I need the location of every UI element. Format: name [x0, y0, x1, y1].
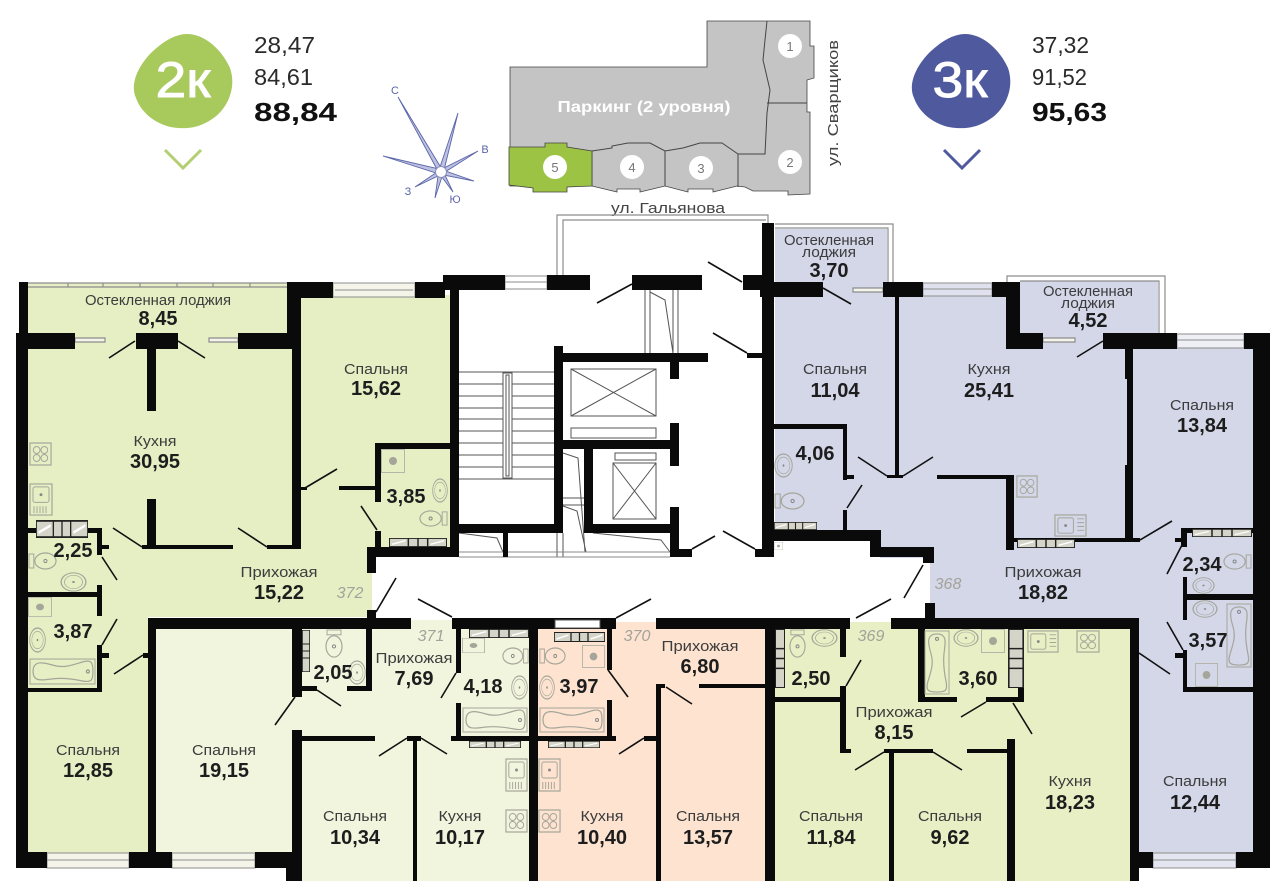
label: bedroom 11,04: 11,04: [811, 380, 860, 402]
label: bath 3,85: 3,85: [387, 486, 425, 508]
label: kitchen 18,23: [1045, 773, 1095, 814]
label: hall 7,69: Прихожая: [376, 650, 452, 667]
label: bath 3,97: 3,97: [560, 676, 598, 698]
label: bedroom 15,62: Спальня: [344, 361, 408, 378]
label: bedroom 13,57: 13,57: [683, 827, 733, 849]
floor plan: [16, 215, 1270, 881]
label: bedroom 11,84: 11,84: [807, 827, 856, 849]
label: hall 18,82: 18,82: [1018, 582, 1068, 604]
fixtures: drain boxes: [28, 450, 1218, 686]
fixtures: toilets: [29, 493, 1251, 664]
header: 3-room apartment summary: [912, 32, 1107, 168]
label: kitchen 25,41: [964, 361, 1014, 402]
label: bedroom 13,84: 13,84: [1177, 415, 1228, 437]
label: bath 2,34: 2,34: [1183, 554, 1222, 576]
label: bedroom 19,15: Спальня: [192, 742, 256, 759]
icon: compass rose: Ю: [449, 194, 461, 206]
building number text: 4: [628, 160, 636, 175]
label: apartment 372: 372: [337, 585, 363, 602]
label: hall 18,82: Прихожая: [1004, 564, 1082, 581]
label: hall 8,15: Прихожая: [856, 704, 932, 721]
fixtures: bathtubs: [30, 604, 1251, 732]
label: bath 3,87: 3,87: [54, 621, 92, 643]
label: hall 7,69: 7,69: [395, 668, 433, 690]
label: bath 3,60: 3,60: [959, 668, 997, 690]
label: bedroom 11,04: [803, 361, 867, 402]
label: kitchen 10,40: [577, 808, 627, 849]
label: loggia 8,45: Остекленная лоджия: [85, 292, 231, 309]
areas: 2к: 84,61: [254, 64, 313, 90]
label: kitchen 25,41: Кухня: [968, 361, 1010, 378]
label: loggia 8,45: [85, 292, 231, 330]
areas: 3к: 95,63: [1032, 97, 1107, 127]
building number text: 1: [786, 39, 794, 54]
areas: 3к: [1032, 32, 1107, 127]
parking label: Паркинг (2 уровня): [558, 99, 730, 116]
label: loggia 3,70: Остекленная: [784, 232, 874, 249]
label: bedroom 9,62: Спальня: [918, 808, 982, 825]
windows: [47, 276, 1244, 868]
label: kitchen 30,95: [130, 433, 180, 473]
apartment 368 fill: [775, 229, 1253, 855]
building dividers: [592, 21, 807, 187]
label: hall 15,22: 15,22: [254, 582, 304, 604]
label: bedroom 11,84: [799, 808, 863, 849]
label: bedroom 10,34: 10,34: [330, 827, 381, 849]
label: bedroom 12,85: [56, 742, 120, 782]
label: bedroom 11,84: Спальня: [799, 808, 863, 825]
label: hall 15,22: Прихожая: [240, 564, 318, 581]
label: bedroom 15,62: [344, 361, 408, 400]
icon: blue chevron: [944, 150, 980, 168]
label: bath 4,18: 4,18: [464, 676, 502, 698]
building core: stairs and lifts: [459, 290, 678, 557]
areas: 2к: 28,47: [254, 32, 315, 58]
apartment 372 fill: [20, 283, 450, 855]
building numbers: [543, 34, 802, 180]
label: loggia 3,70: лоджия: [802, 244, 856, 261]
loggia glazing outlines: [28, 215, 1165, 342]
building number text: [551, 39, 794, 176]
label: hall 6,80: 6,80: [681, 656, 719, 678]
building body: [510, 21, 814, 195]
icon: 2к green blob: 2к: [156, 52, 212, 108]
label: kitchen 18,23: 18,23: [1045, 792, 1095, 814]
label: kitchen 10,40: 10,40: [577, 827, 627, 849]
label: loggia 3,70: [784, 232, 874, 282]
building number text: 2: [786, 155, 794, 170]
fixtures: wash basins: [30, 454, 1217, 699]
label: bath 4,06: 4,06: [796, 443, 834, 465]
label: bedroom 12,44: Спальня: [1163, 773, 1227, 790]
icon: compass rose: З: [405, 186, 412, 198]
label: kitchen 10,17: [435, 808, 485, 849]
areas: 2к: [254, 32, 338, 127]
label: apartment 370: 370: [624, 628, 650, 645]
label: bedroom 13,84: [1170, 397, 1234, 437]
label: hall 18,82: [1004, 564, 1082, 604]
label: kitchen 18,23: Кухня: [1048, 773, 1092, 790]
apartment 371 fill: [148, 620, 532, 881]
label: loggia 4,52: лоджия: [1061, 295, 1115, 312]
label: kitchen 10,17: Кухня: [438, 808, 482, 825]
fixtures: utility risers: [36, 520, 1251, 748]
label: bedroom 13,57: Спальня: [676, 808, 740, 825]
label: kitchen 25,41: 25,41: [964, 380, 1014, 402]
street: Сварщиков: ул. Сварщиков: [825, 40, 842, 166]
label: bedroom 13,57: [676, 808, 740, 849]
areas: 2к: 88,84: [254, 97, 338, 127]
icon: green chevron: [165, 150, 201, 168]
building number text: 3: [697, 161, 705, 176]
label: bedroom 13,84: Спальня: [1170, 397, 1234, 414]
icon: 3к blue blob: 3к: [932, 52, 989, 108]
label: bedroom 9,62: 9,62: [931, 827, 969, 849]
label: hall 6,80: Прихожая: [662, 638, 738, 655]
label: loggia 3,70: 3,70: [810, 260, 848, 282]
street: Гальянова: ул. Гальянова: [611, 200, 726, 217]
label: bedroom 12,85: 12,85: [63, 760, 113, 782]
building number text: 5: [551, 160, 559, 175]
label: bedroom 12,44: [1163, 773, 1227, 814]
label: kitchen 10,40: Кухня: [580, 808, 624, 825]
fixtures: stoves: [30, 443, 1099, 832]
label: loggia 4,52: [1043, 283, 1133, 332]
label: apartment 368: 368: [935, 576, 961, 593]
label: bedroom 10,34: [323, 808, 387, 849]
label: bedroom 10,34: Спальня: [323, 808, 387, 825]
label: loggia 4,52: Остекленная: [1043, 283, 1133, 300]
label: bath 2,05: 2,05: [314, 662, 352, 684]
label: bedroom 11,04: Спальня: [803, 361, 867, 378]
label: bedroom 12,85: Спальня: [56, 742, 120, 759]
label: kitchen 10,17: 10,17: [435, 827, 485, 849]
label: bath 2,50: 2,50: [792, 668, 830, 690]
label: bedroom 9,62: [918, 808, 982, 849]
icon: 2к green blob: [134, 34, 232, 128]
header: 2-room apartment summary: [134, 32, 338, 168]
fixtures: kitchen sinks: [30, 484, 1086, 791]
icon: compass rose: В: [481, 144, 489, 156]
areas: 3к: 37,32: [1032, 32, 1089, 58]
label: bedroom 12,44: 12,44: [1170, 792, 1221, 814]
label: loggia 4,52: 4,52: [1069, 310, 1107, 332]
label: bedroom 19,15: 19,15: [199, 760, 249, 782]
icon: compass rose: [383, 85, 489, 206]
label: bedroom 19,15: [192, 742, 256, 782]
label: kitchen 30,95: 30,95: [130, 451, 180, 473]
icon: compass rose: С: [391, 85, 399, 97]
label: bedroom 15,62: 15,62: [351, 378, 401, 400]
label: loggia 8,45: 8,45: [139, 308, 177, 330]
door swings: [102, 262, 1183, 770]
label: hall 8,15: [856, 704, 932, 744]
label: kitchen 30,95: Кухня: [134, 433, 176, 450]
label: hall 8,15: 8,15: [875, 722, 913, 744]
label: hall 6,80: [662, 638, 738, 678]
apartment 370 fill: [536, 622, 768, 881]
walls: [16, 223, 1270, 881]
label: hall 15,22: [240, 564, 318, 604]
building 5 highlighted: [509, 143, 592, 192]
label: hall 7,69: [376, 650, 452, 690]
label: bath 3,57: 3,57: [1189, 630, 1227, 652]
label: apartment 369: 369: [858, 628, 884, 645]
icon: 3к blue blob: [912, 34, 1010, 128]
site map: [509, 21, 842, 217]
label: apartment 371: 371: [418, 628, 444, 645]
label: bath 2,25: 2,25: [54, 540, 92, 562]
apartment 369 fill: [772, 622, 1132, 881]
areas: 3к: 91,52: [1032, 64, 1087, 90]
